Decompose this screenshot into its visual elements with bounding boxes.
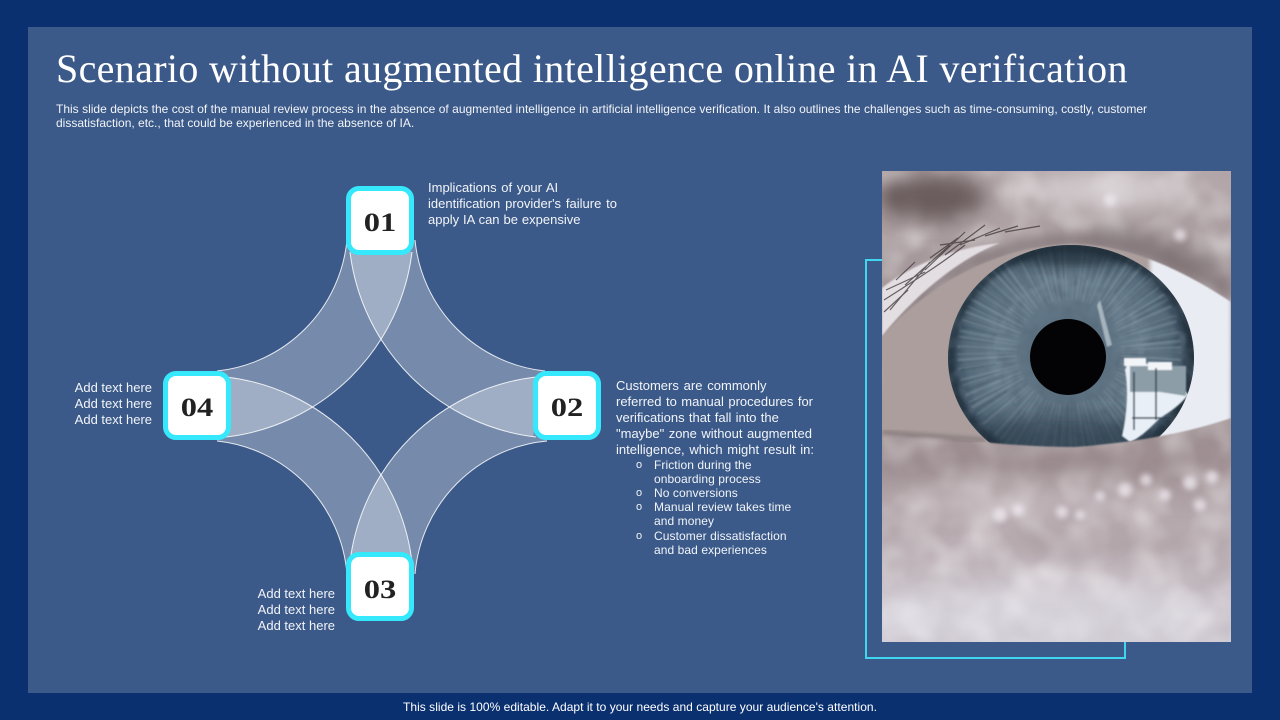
text block 04: Add text here — [75, 380, 152, 395]
text block 04: Add text here — [75, 412, 152, 427]
text block 02 with bullet list: Friction during the — [654, 458, 752, 472]
window reflection — [1097, 300, 1188, 442]
text block 02 with bullet list: and bad experiences — [654, 543, 767, 557]
iris — [948, 245, 1194, 448]
text block 02 with bullet list: o — [636, 459, 642, 471]
eyelid fold — [882, 240, 1231, 332]
description text: dissatisfaction, etc., that could be experienced in the absence of IA. — [56, 116, 414, 130]
text block 03: Add text here — [258, 586, 335, 601]
text block 02 with bullet list: intelligence, which might result in: — [616, 442, 814, 457]
white upper lid rim — [882, 243, 1000, 336]
text block 02 with bullet list: verifications that fall into the — [616, 410, 779, 425]
brow shadow and soft highlights — [870, 172, 1236, 638]
text block 02 with bullet list: "maybe" zone without augmented — [616, 426, 812, 441]
band 03 to 02 — [350, 377, 547, 574]
cyan photo frame — [865, 259, 1126, 659]
pupil — [1030, 319, 1106, 395]
number box 01 — [346, 186, 414, 255]
text block 02 with bullet list: onboarding process — [654, 472, 761, 486]
band 03 to 04 — [217, 377, 412, 574]
text block 01: Implications of your AI — [428, 180, 558, 195]
text block 04 — [74, 380, 152, 427]
text block 02 with bullet list: referred to manual procedures for — [616, 394, 813, 409]
text block 02 with bullet list: Customers are commonly — [616, 378, 766, 393]
iris texture — [948, 260, 1194, 430]
text block 04: Add text here — [75, 396, 152, 411]
footer note: This slide is 100% editable. Adapt it to your needs and capture your audience's attention. — [403, 700, 877, 714]
band 01 to 02 — [350, 240, 545, 437]
text block 02 with bullet list: No conversions — [654, 486, 738, 500]
number box 04: 04 — [181, 393, 213, 422]
lower iris shade — [976, 404, 1162, 448]
text block 03: Add text here — [258, 602, 335, 617]
text block 01 — [428, 180, 617, 227]
title: Scenario without augmented intelligence online in AI verification — [56, 46, 1128, 91]
text block 03 — [258, 586, 335, 633]
text block 02 with bullet list: o — [636, 501, 642, 513]
number box 03: 03 — [364, 575, 396, 604]
text block 02 with bullet list: and money — [654, 514, 714, 528]
lower lid crease — [882, 432, 985, 440]
under-eye highlights — [993, 194, 1218, 522]
description text — [56, 102, 1147, 130]
text block 03: Add text here — [258, 618, 335, 633]
number box 01: 01 — [364, 208, 396, 237]
text block 02 with bullet list: o — [636, 530, 642, 542]
text block 02 with bullet list: o — [636, 487, 642, 499]
text block 02 with bullet list: Manual review takes time — [654, 500, 791, 514]
photo: close-up of a human eye — [882, 171, 1231, 642]
sclera — [882, 244, 1150, 442]
eye opening — [882, 244, 1231, 448]
iris fibres — [977, 260, 1161, 444]
number box 02 — [533, 371, 601, 440]
text block 02 with bullet list: Customer dissatisfaction — [654, 529, 787, 543]
iris rim — [951, 248, 1191, 468]
text block 01: apply IA can be expensive — [428, 212, 580, 227]
upper iris shadow — [1002, 245, 1139, 272]
description text: This slide depicts the cost of the manual review process in the absence of augmented intelligence in artificial intelligence verification. It also outlines the challenges such as time-consuming, costly, customer — [56, 102, 1147, 116]
number box 04 — [163, 371, 231, 440]
text block 01: identification provider's failure to — [428, 196, 617, 211]
eyelashes — [884, 225, 1040, 312]
band 01 to 04 — [217, 240, 412, 437]
number box 03 — [346, 552, 414, 621]
skin base — [882, 171, 1231, 642]
number box 02: 02 — [551, 393, 583, 422]
text block 02 with bullet list — [616, 378, 814, 557]
